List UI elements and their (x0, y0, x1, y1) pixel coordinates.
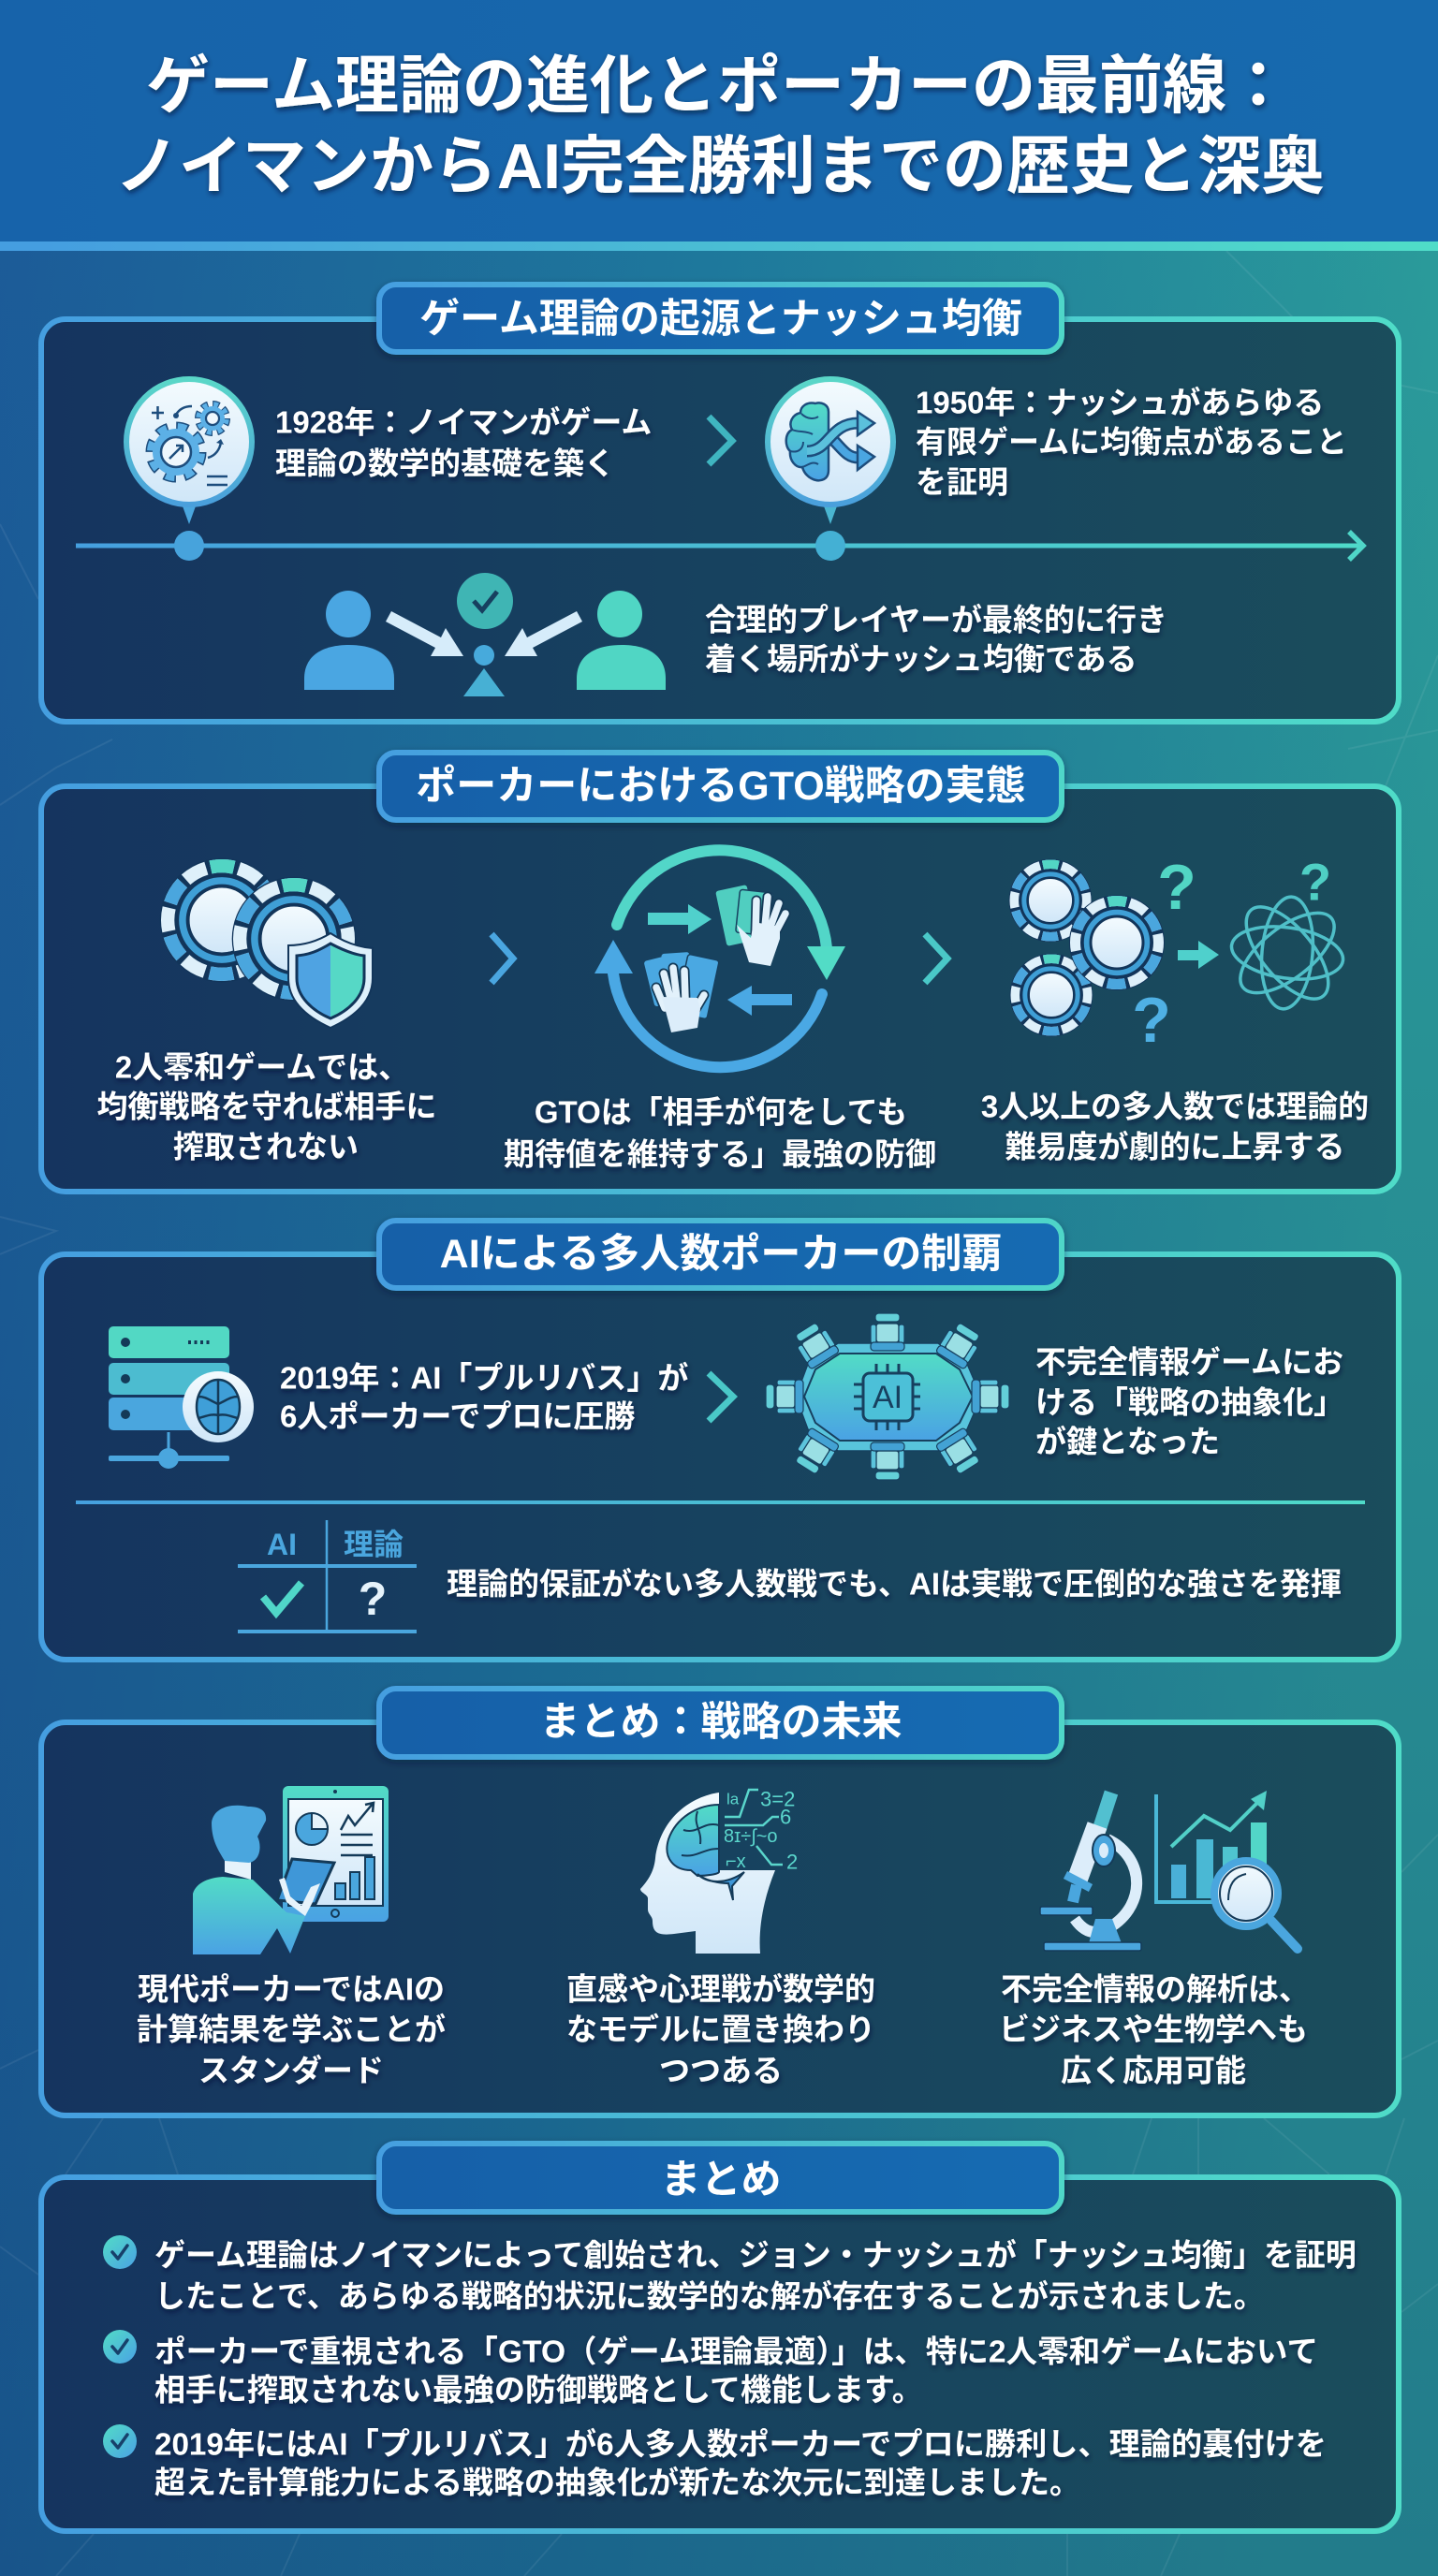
icon: head with brain and formulas: 6 (780, 1805, 791, 1829)
panel: ポーカーにおけるGTO戦略の実態 (41, 753, 1399, 1192)
text: applications: 不完全情報の解析は、 (1001, 1971, 1310, 2007)
text: abstraction: 不完全情報ゲームにお (1035, 1344, 1343, 1380)
heading pill: まとめ：戦略の未来 (539, 1700, 902, 1745)
icon: chips, question marks and atom (1007, 852, 1347, 1056)
bullet 2: 相手に搾取されない最強の防御戦略として機能します。 (154, 2372, 923, 2408)
text: practical strength: 理論的保証がない多人数戦でも、AIは実戦で圧倒的な強さを発揮 (447, 1567, 1342, 1601)
icon: AI table with eight seats: AI (873, 1380, 902, 1415)
panel: ゲーム理論の起源とナッシュ均衡 (41, 285, 1399, 722)
icon: brain with arrows in bubble (768, 379, 893, 561)
text: study AI: 現代ポーカーではAIの (138, 1971, 445, 2007)
text: multiplayer: 難易度が劇的に上昇する (1005, 1129, 1344, 1164)
text: 1928: 1928年：ノイマンがゲーム (275, 404, 652, 440)
text: math models: つつある (659, 2054, 783, 2087)
icon: server with brain (109, 1326, 254, 1469)
text: applications: 広く応用可能 (1061, 2054, 1246, 2087)
text: study AI: 計算結果を学ぶことが (137, 2012, 446, 2046)
icon: players converging (304, 573, 666, 696)
text: 1950: 有限ゲームに均衡点があること (916, 425, 1347, 459)
icon: head with brain and formulas: ⌐x (726, 1852, 746, 1872)
icon: cycle of hands with cards (594, 850, 845, 1067)
chevron (709, 417, 732, 464)
text: abstraction: ける「戦略の抽象化」 (1035, 1385, 1344, 1419)
icon: microscope and chart with magnifier (1040, 1791, 1298, 1951)
text: 1950: 1950年：ナッシュがあらゆる (916, 386, 1324, 419)
icon: chips and shield (157, 856, 373, 1028)
chart: AI vs theory table: 理論 (344, 1528, 404, 1561)
bullet 2: ポーカーで重視される「GTO（ゲーム理論最適）」は、特に2人零和ゲームにおいて (154, 2334, 1318, 2368)
icon: gears in bubble (126, 379, 252, 561)
icon: head with brain and formulas (640, 1788, 798, 1954)
bullet 3: 超えた計算能力による戦略の抽象化が新たな次元に到達しました。 (154, 2466, 1080, 2499)
panel: AIによる多人数ポーカーの制覇 (41, 1221, 1399, 1660)
text: multiplayer (981, 1090, 1369, 1164)
text: multiplayer: 3人以上の多人数では理論的 (981, 1090, 1369, 1123)
text: math models (566, 1971, 875, 2087)
heading pill (379, 1221, 1062, 1288)
heading pill: ポーカーにおけるGTO戦略の実態 (416, 764, 1026, 809)
bullet 3 (103, 2424, 1327, 2499)
heading pill: まとめ (661, 2158, 781, 2203)
chevron (709, 1373, 733, 1421)
text: GTO: GTOは「相手が何をしても (535, 1095, 907, 1129)
text: zero-sum: 均衡戦略を守れば相手に (97, 1090, 436, 1123)
text: Nash equilibrium note (705, 603, 1167, 676)
text: Nash equilibrium note: 着く場所がナッシュ均衡である (705, 642, 1137, 676)
bullet 1: したことで、あらゆる戦略的状況に数学的な解が存在することが示されました。 (154, 2278, 1265, 2314)
text: 1928: 理論の数学的基礎を築く (275, 446, 615, 481)
chevron (925, 934, 947, 983)
icon: head with brain and formulas: 3=2 (760, 1788, 795, 1810)
text: zero-sum: 2人零和ゲームでは、 (115, 1050, 409, 1084)
chart: AI vs theory table: ? (359, 1573, 387, 1625)
text: abstraction: が鍵となった (1035, 1425, 1220, 1458)
panel: まとめ：戦略の未来 (41, 1689, 1399, 2115)
text: zero-sum (97, 1050, 436, 1164)
text: zero-sum: 搾取されない (173, 1129, 359, 1164)
icon: chips, question marks and atom: ? (1157, 852, 1196, 923)
heading pill: ゲーム理論の起源とナッシュ均衡 (419, 297, 1022, 342)
title (115, 51, 1325, 202)
text: applications (999, 1971, 1310, 2087)
text: math models: 直感や心理戦が数学的 (566, 1971, 875, 2007)
icon: head with brain and formulas: 8ɪ÷∫~o (724, 1826, 777, 1847)
heading pill (379, 285, 1062, 352)
chart: AI vs theory table: AI (267, 1528, 297, 1561)
bullet 3: 2019年にはAI「プルリバス」が6人多人数ポーカーでプロに勝利し、理論的裏付けを (154, 2426, 1327, 2462)
text: Nash equilibrium note: 合理的プレイヤーが最終的に行き (705, 603, 1167, 637)
text: 1950 (916, 386, 1347, 500)
title: ノイマンからAI完全勝利までの歴史と深奥 (115, 131, 1325, 202)
text: math models: なモデルに置き換わり (566, 2012, 875, 2046)
icon: head with brain and formulas: 2 (786, 1850, 798, 1874)
text: study AI: スタンダード (198, 2054, 384, 2087)
panel: まとめ (41, 2144, 1399, 2531)
title: ゲーム理論の進化とポーカーの最前線： (146, 51, 1290, 122)
text: 2019: 2019年：AI「プルリバス」が (280, 1361, 688, 1395)
text: study AI (137, 1971, 446, 2087)
heading pill: AIによる多人数ポーカーの制覇 (440, 1232, 1002, 1277)
text: GTO (504, 1095, 936, 1172)
icon: chips, question marks and atom: ? (1132, 985, 1171, 1056)
bullet 2 (103, 2330, 1318, 2408)
text: 1950: を証明 (916, 464, 1008, 500)
text: 2019: 6人ポーカーでプロに圧勝 (280, 1398, 635, 1434)
text: applications: ビジネスや生物学へも (999, 2012, 1308, 2046)
timeline arrow (76, 532, 1363, 560)
header band (0, 0, 1438, 251)
text: GTO: 期待値を維持する」最強の防御 (504, 1136, 936, 1172)
chart: AI vs theory table (238, 1520, 417, 1632)
text: abstraction (1035, 1344, 1344, 1458)
text: 1928 (275, 404, 652, 481)
text: 2019 (280, 1361, 688, 1434)
icon: head with brain and formulas: la (726, 1790, 740, 1808)
chevron (492, 934, 513, 983)
icon: chips, question marks and atom: ? (1299, 852, 1331, 912)
icon: analyst with tablet (193, 1786, 389, 1954)
heading pill (379, 1689, 1062, 1757)
bullet 1 (103, 2235, 1357, 2314)
bullet 1: ゲーム理論はノイマンによって創始され、ジョン・ナッシュが「ナッシュ均衡」を証明 (154, 2237, 1357, 2273)
heading pill (379, 753, 1062, 820)
heading pill (379, 2144, 1062, 2212)
icon: AI table with eight seats (766, 1313, 1009, 1480)
